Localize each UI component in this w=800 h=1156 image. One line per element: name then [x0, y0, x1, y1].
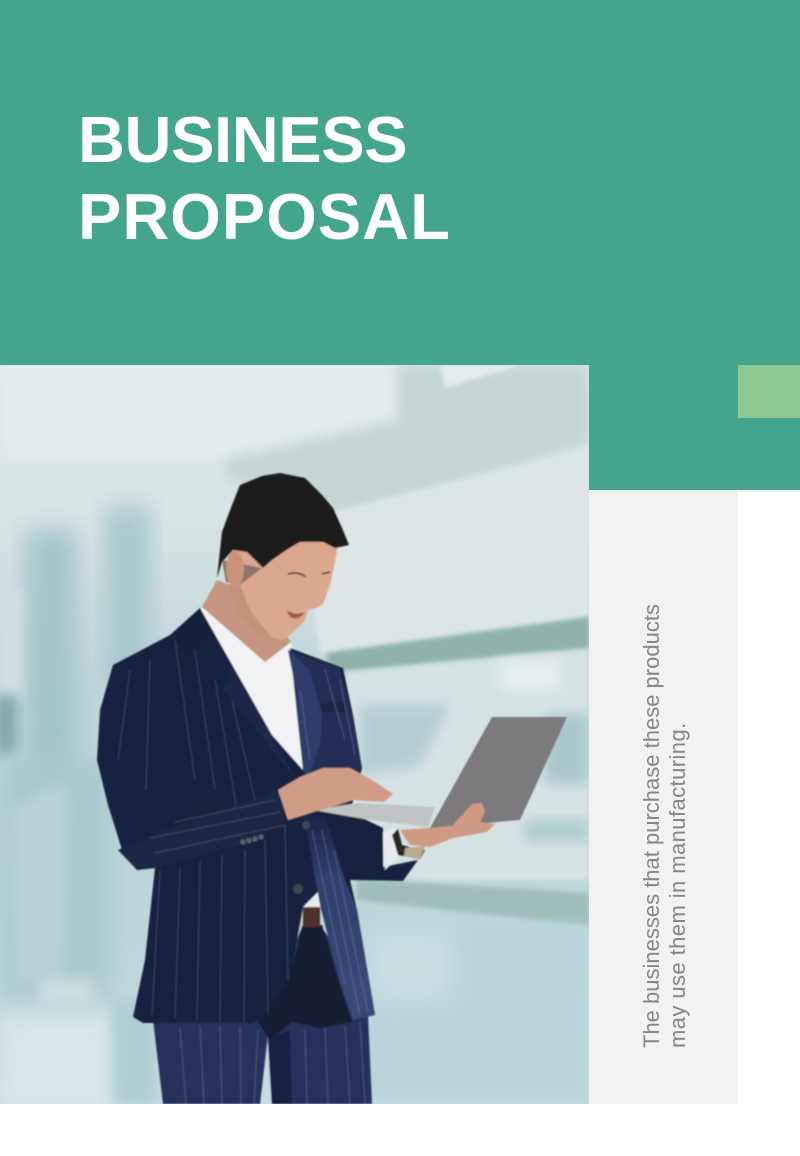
- photo: businessman with laptop: [0, 365, 589, 1104]
- eyes and mouth: [288, 572, 330, 577]
- rotated caption text: may use them in manufacturing.: [665, 722, 690, 1048]
- rotated caption text: The businesses that purchase these products: [639, 604, 664, 1048]
- ear: [226, 551, 244, 587]
- man: suit jacket: [97, 608, 418, 1023]
- jacket buttons: [293, 821, 310, 894]
- laptop: [313, 717, 567, 828]
- hair: [217, 473, 349, 578]
- man: trousers: [153, 925, 372, 1104]
- rotated caption text: [639, 604, 690, 1048]
- green side block: [589, 365, 800, 490]
- sleeve buttons: [240, 834, 264, 845]
- wrist watch: [392, 829, 425, 859]
- light green accent square: [738, 365, 800, 418]
- man with laptop: [97, 473, 567, 1104]
- header panel: green band: [0, 0, 800, 365]
- title: PROPOSAL: [78, 180, 451, 253]
- office background: [0, 365, 589, 1116]
- shirt cuff: [383, 827, 398, 870]
- panel: grey text column: [589, 490, 738, 1104]
- man: head and neck: [202, 473, 349, 662]
- pinstripes: [118, 640, 368, 1022]
- man: shirt and belt: [200, 607, 320, 927]
- man: hands: [278, 768, 495, 847]
- title: [78, 103, 451, 253]
- title: BUSINESS: [78, 103, 407, 176]
